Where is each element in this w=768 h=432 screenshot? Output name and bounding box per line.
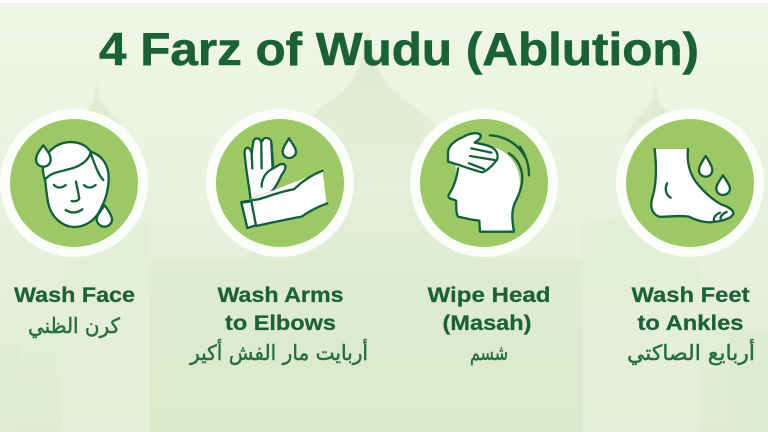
step 3: wipe head bbox=[410, 109, 558, 366]
title: 4 Farz of Wudu (Ablution) bbox=[99, 23, 699, 75]
arabic label: wipe head: شسم bbox=[470, 341, 508, 366]
label: to elbows: to Elbows bbox=[225, 311, 336, 335]
arabic label: wash arms: أربايت مار الفش أكير bbox=[189, 339, 368, 365]
label: wash arms: Wash Arms bbox=[218, 283, 344, 307]
label: masah: (Masah) bbox=[442, 311, 532, 335]
step 2: wash arms bbox=[189, 109, 368, 365]
arabic label: wash feet: أربايع الصاكتي bbox=[627, 339, 755, 365]
step 4: wash feet bbox=[616, 109, 764, 365]
label: to ankles: to Ankles bbox=[638, 311, 744, 335]
label: wash face: Wash Face bbox=[14, 283, 135, 307]
step 1: wash face bbox=[0, 109, 148, 338]
icon: arm and hand with water drop bbox=[206, 109, 354, 257]
label: wash feet: Wash Feet bbox=[632, 283, 750, 307]
icon: face with water drops bbox=[0, 109, 148, 257]
arabic label: wash face: كرن الظني bbox=[28, 314, 120, 338]
icon: head with wiping hand bbox=[410, 109, 558, 257]
label: wipe head: Wipe Head bbox=[428, 283, 550, 307]
icon: foot with water drops bbox=[616, 109, 764, 257]
